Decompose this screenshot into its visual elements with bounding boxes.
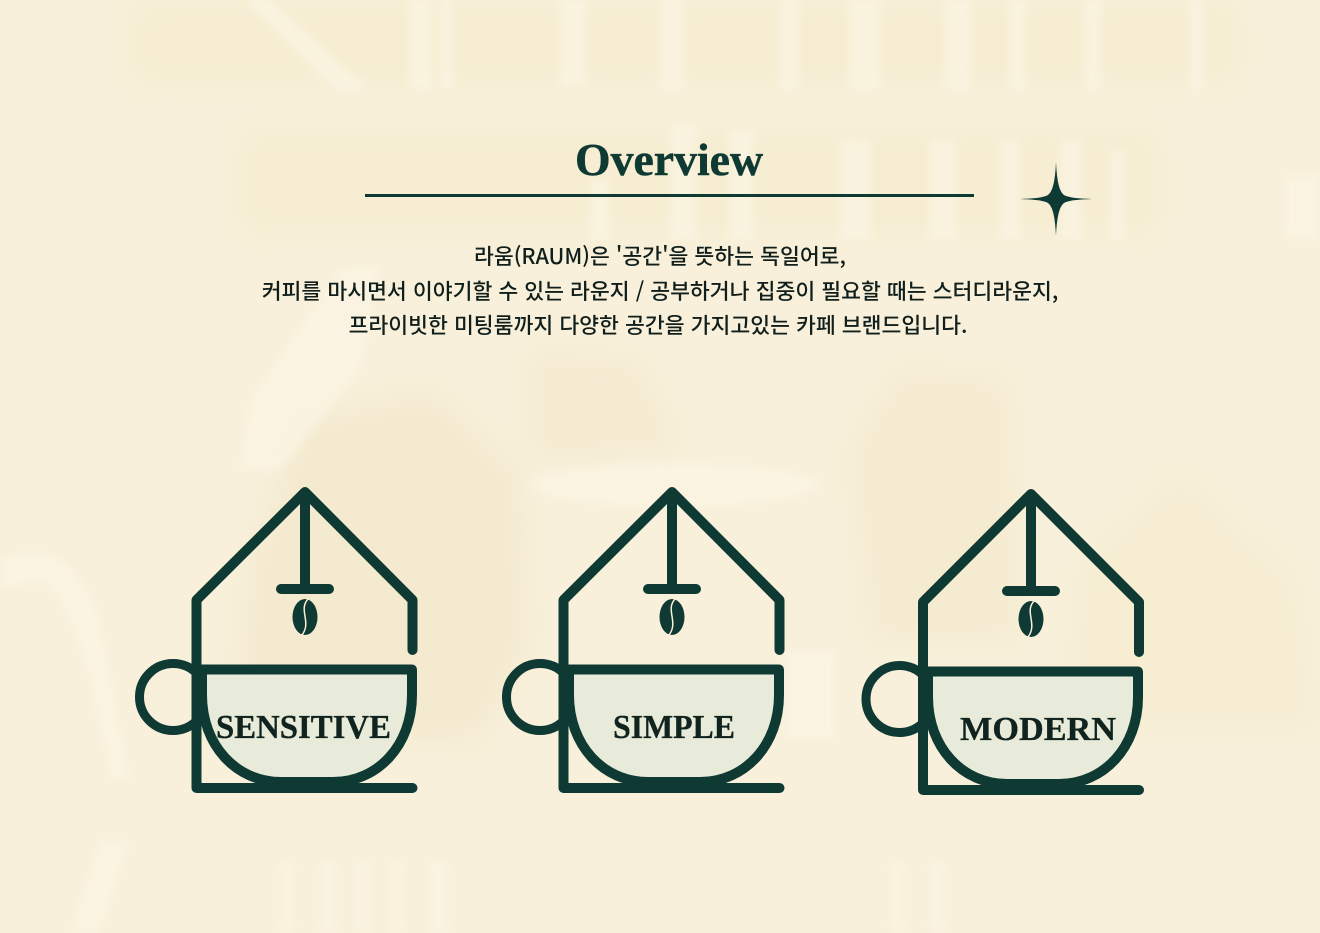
icon: modern cup house: MODERN: [960, 711, 1116, 748]
description line 3: 프라이빗한 미팅룸까지 다양한 공간을 가지고있는 카페 브랜드입니다.: [349, 309, 967, 340]
icon: sensitive cup house: SENSITIVE: [216, 709, 391, 746]
icon: sensitive cup house: [140, 492, 412, 788]
description text block: [262, 240, 1058, 340]
icon: four-point star: [1020, 162, 1092, 236]
description line 2: 커피를 마시면서 이야기할 수 있는 라운지 / 공부하거나 집중이 필요할 때는 스터디라운지,: [262, 275, 1058, 306]
title: Overview: [575, 134, 763, 185]
icon: modern cup house: [866, 494, 1139, 790]
icon: simple cup house: [506, 492, 780, 788]
title underline: [365, 194, 974, 197]
description line 1: 라움(RAUM)은 '공간'을 뜻하는 독일어로,: [474, 240, 846, 271]
icon: simple cup house: SIMPLE: [613, 709, 735, 746]
